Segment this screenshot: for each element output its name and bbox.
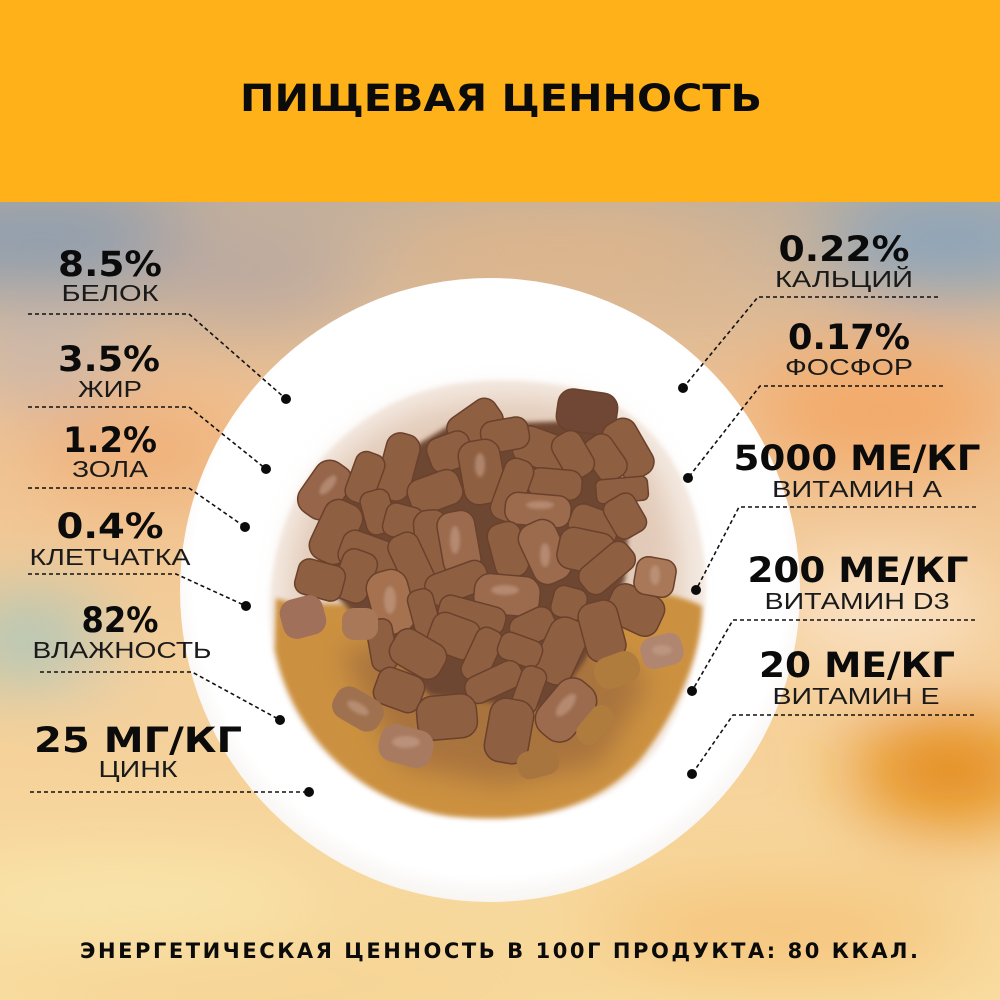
callout: влажность bbox=[32, 601, 285, 725]
meat chunks bbox=[277, 387, 686, 782]
callout: влажность: ВЛАЖНОСТЬ bbox=[32, 637, 212, 663]
bowl bbox=[180, 278, 800, 902]
brown sauce bbox=[275, 589, 702, 818]
callout: жир: ЖИР bbox=[78, 376, 142, 402]
callout: зола: ЗОЛА bbox=[72, 456, 149, 482]
upper pale sauce bbox=[270, 380, 706, 820]
title: ПИЩЕВАЯ ЦЕННОСТЬ bbox=[240, 77, 762, 120]
dark base under chunks bbox=[325, 420, 630, 710]
callout: витамин A: 5000 МЕ/КГ bbox=[734, 439, 980, 479]
callout: цинк: ЦИНК bbox=[98, 756, 178, 782]
callout: витамин A bbox=[691, 439, 980, 595]
callout: витамин D3: 200 МЕ/КГ bbox=[748, 551, 968, 591]
callout: кальций: КАЛЬЦИЙ bbox=[775, 265, 913, 292]
callout: белок: БЕЛОК bbox=[62, 280, 159, 306]
callout: кальций: 0.22% bbox=[778, 230, 910, 270]
callout: жир: 3.5% bbox=[58, 340, 160, 380]
callout: жир bbox=[28, 340, 271, 474]
sauce gloss highlights bbox=[316, 453, 672, 748]
callout: клетчатка: КЛЕТЧАТКА bbox=[30, 544, 191, 570]
callout: клетчатка: 0.4% bbox=[56, 507, 164, 547]
header band bbox=[0, 0, 1000, 202]
callout: витамин D3: ВИТАМИН D3 bbox=[764, 588, 950, 614]
callout: витамин E: 20 МЕ/КГ bbox=[759, 646, 955, 686]
callout: цинк: 25 МГ/КГ bbox=[34, 721, 242, 761]
callout: клетчатка bbox=[28, 507, 251, 611]
callout: кальций bbox=[678, 230, 938, 393]
callout: фосфор: ФОСФОР bbox=[785, 354, 913, 380]
callout: белок bbox=[28, 245, 291, 404]
callout: витамин A: ВИТАМИН А bbox=[772, 476, 943, 502]
white bowl with food bbox=[180, 278, 800, 902]
callout: зола bbox=[28, 421, 250, 532]
callout: витамин E: ВИТАМИН Е bbox=[772, 683, 940, 709]
callout: белок: 8.5% bbox=[58, 245, 162, 285]
footer: energy value: ЭНЕРГЕТИЧЕСКАЯ ЦЕННОСТЬ В 100Г ПРОДУКТА: 80 ККАЛ. bbox=[80, 939, 918, 963]
callout: витамин E bbox=[687, 646, 974, 779]
callout: зола: 1.2% bbox=[63, 421, 157, 461]
callout: цинк bbox=[30, 721, 314, 797]
callout: влажность: 82% bbox=[82, 601, 158, 641]
callout: витамин D3 bbox=[687, 551, 975, 696]
callout: фосфор bbox=[683, 318, 943, 483]
callout: фосфор: 0.17% bbox=[788, 318, 910, 358]
